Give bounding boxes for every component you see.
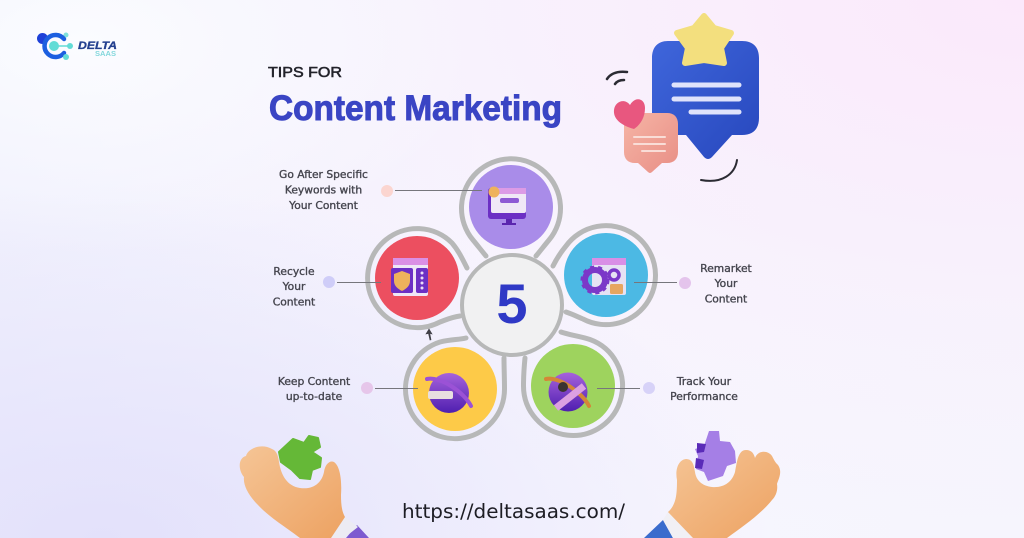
icon: planet [427,373,471,413]
callout: remarket: Content [705,292,747,306]
callout: track: Track Your [676,375,732,388]
panel: keep up-to-date circle [413,347,497,431]
logo: DELTA [78,40,117,52]
icon: right hand with purple puzzle [644,431,780,538]
website url: https://deltasaas.com/ [402,500,625,523]
panel: center number [462,255,562,355]
callout: recycle: Recycle [273,265,315,278]
logo [37,32,117,60]
icon: shield window [391,258,428,296]
callout: keep up to date: up-to-date [286,390,342,403]
icon: gears window [582,258,626,295]
callout: recycle: Your [282,280,306,293]
icon: planet with ring [546,372,589,412]
panel: recycle circle [375,236,459,320]
flower diagram [368,159,655,439]
panel: center number: 5 [496,272,528,335]
callout: keywords [279,168,482,212]
callout: remarket: Your [714,277,738,290]
icon: chat bubbles with star and heart [607,16,759,181]
icon: left hand with green puzzle [240,436,369,538]
callout: remarket: Remarket [700,262,752,275]
callout: keywords: Your Content [288,199,358,212]
cursor arrow [426,329,432,340]
callout: recycle [273,265,381,308]
panel: keywords circle [469,165,553,249]
callout: remarket [634,262,752,306]
heading: tips for: TIPS FOR [268,65,342,81]
title: Content Marketing [269,89,562,128]
callout: keep up to date: Keep Content [278,375,350,388]
callout: keywords: Keywords with [285,184,362,196]
panel: remarket circle [564,233,648,317]
icon: monitor [488,186,526,225]
callout: track: Performance [670,390,738,403]
logo: SAAS [95,51,116,58]
callout: keep up to date [278,375,418,403]
callout: keywords: Go After Specific [279,168,368,181]
callout: recycle: Content [273,296,315,308]
callout: track [597,375,738,403]
panel: track performance circle [531,344,615,428]
connector rings [368,159,655,439]
